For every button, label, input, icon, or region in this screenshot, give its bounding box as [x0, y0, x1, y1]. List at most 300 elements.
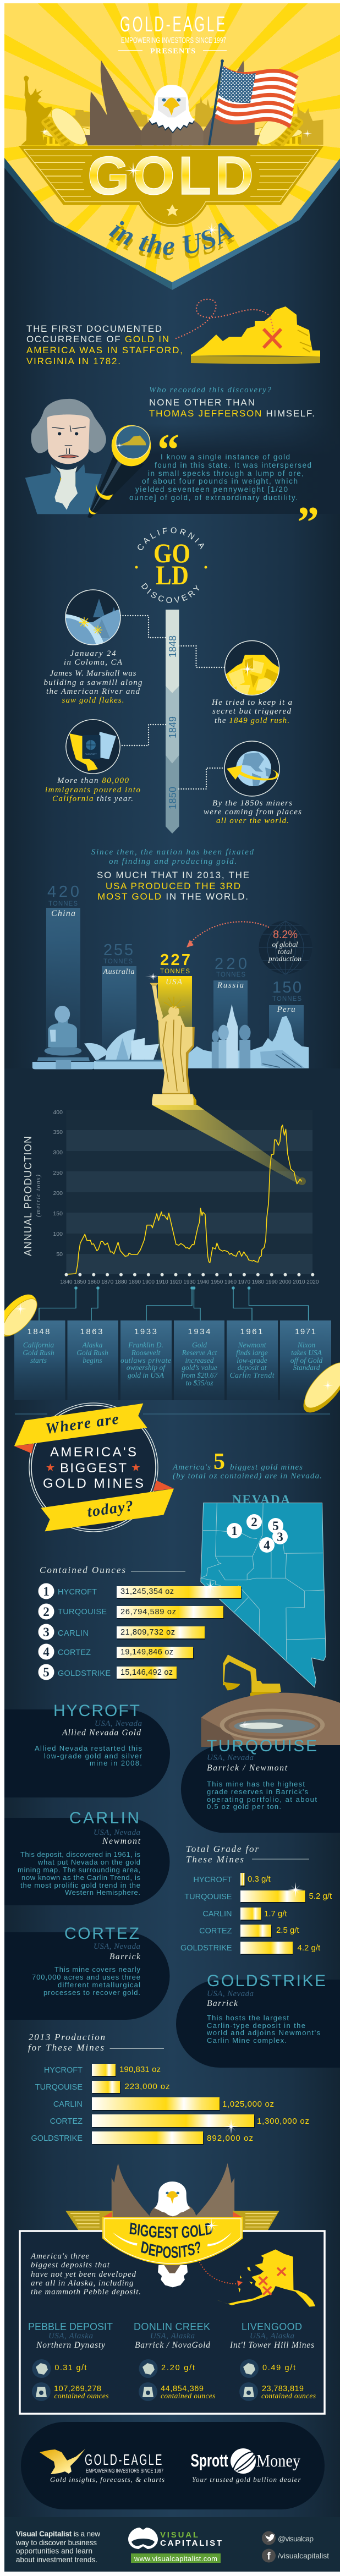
chart: contained ounces: GOLDSTRIKE — [58, 1669, 111, 1678]
heading: California Gold Discovery: LD — [156, 560, 189, 590]
map: Nevada: 4 — [264, 1538, 270, 1552]
arrow: dotted route — [176, 299, 273, 338]
chart: contained ounces: CARLIN — [58, 1629, 89, 1638]
header logo: Gold-Eagle: PRESENTS — [150, 47, 195, 56]
chart: contained ounces: HYCROFT — [58, 1588, 97, 1597]
text: first documented occurrence: VIRGINIA IN 1782. — [26, 356, 120, 366]
bar: Peru: 150 — [272, 979, 301, 996]
panel text: 1934: Gold — [192, 1341, 207, 1349]
bar: China: TONNES — [48, 901, 78, 907]
header bevel edge — [4, 158, 340, 290]
panel: Carlin: This deposit, discovered in 1961, is — [20, 1850, 141, 1859]
panel text: 1863: Alaska — [82, 1341, 103, 1349]
panel: Turquoise: 0.5 oz gold per ton. — [207, 1802, 281, 1811]
chart: x axis: 1970 — [238, 1279, 250, 1285]
text: since then — [91, 848, 254, 902]
quote: Jefferson: in small specks through a lump of ore, — [148, 469, 304, 478]
map: Nevada: 5 — [272, 1519, 279, 1533]
map: Virginia — [176, 299, 320, 364]
chart: production line — [67, 1125, 302, 1274]
bar: Russia — [213, 955, 248, 1067]
chart: total grade: These Mines — [186, 1854, 244, 1865]
column: Pebble Deposit: Northern Dynasty — [36, 2341, 105, 2350]
panel: Carlin: mining map. The surrounding area, — [18, 1866, 140, 1874]
text: He tried to keep it a secret: He tried to keep it a — [211, 698, 292, 707]
panel: Carlin — [4, 1809, 169, 1905]
panel: Turquoise: Barrick / Newmont — [207, 1763, 288, 1773]
text: By the 1850s miners: By the 1850s miners — [212, 799, 292, 808]
column: Donlin Creek — [134, 2321, 216, 2401]
bar: Australia: Australia — [102, 968, 134, 976]
logo: Gold-Eagle — [40, 2449, 164, 2484]
chart: 2013 production: HYCROFT — [44, 2066, 83, 2075]
panel text: 1971: takes USA — [291, 1349, 322, 1357]
chart: y axis labels: 400 — [53, 1109, 63, 1116]
panel text: 1848: 1848 — [28, 1327, 50, 1336]
column: Livengood: contained ounces — [261, 2392, 316, 2400]
chart: x axis: 2010 — [293, 1279, 305, 1285]
landmark: Statue of Liberty — [145, 973, 196, 1105]
illustration: telescope — [87, 425, 151, 518]
panel: Goldstrike: USA, Nevada — [207, 1989, 254, 1998]
bar: Australia: 255 — [103, 941, 133, 959]
chart: total grade: GOLDSTRIKE — [180, 1944, 232, 1953]
timeline ribbon: 1850 — [167, 787, 178, 809]
chart: x axis: 2000 — [279, 1279, 292, 1285]
panel text: 1933: outlaws private — [120, 1356, 171, 1364]
chart: x axis: 1900 — [142, 1279, 155, 1285]
dotted timeline connectors — [120, 616, 225, 789]
heading: California Gold Discovery: DISCOVERY — [141, 583, 199, 603]
column: Pebble Deposit: contained ounces — [54, 2392, 109, 2400]
chart: 2013 production: 1,025,000 oz — [222, 2100, 274, 2109]
illustration: Thomas Jefferson — [25, 399, 106, 514]
panel: Goldstrike: This hosts the largest — [207, 2014, 289, 2022]
arrow: to Alaska — [200, 2262, 243, 2286]
text: More than 80,000 immigrants: immigrants poured into — [45, 786, 141, 794]
chart: x axis: 1850 — [74, 1279, 86, 1285]
quote: Jefferson: I know a single instance of gold — [161, 453, 290, 461]
column: Pebble Deposit: 0.31 g/t — [54, 2364, 86, 2372]
header coins — [37, 104, 312, 154]
quote: Jefferson: found in this state. It was interspersed — [155, 461, 311, 469]
landmark: Buddha — [32, 1006, 94, 1069]
header gold banner — [19, 146, 323, 227]
landmark: Sydney Opera House — [84, 1029, 166, 1069]
chart: x axis: 1860 — [87, 1279, 100, 1285]
chart: contained ounces: TURQOUISE — [58, 1608, 107, 1616]
social: facebook — [262, 2548, 329, 2563]
panel: Carlin: now known as the Carlin Trend, is — [21, 1873, 141, 1882]
chart: 2013 production: 2013 Production — [29, 2032, 105, 2042]
panel text: 1848: California — [23, 1341, 54, 1349]
chart: contained ounces: 2 — [43, 1605, 50, 1619]
history panels — [14, 1286, 331, 1400]
panel text: 1933: Roosevelt — [131, 1349, 161, 1357]
coin: left — [4, 1294, 37, 1337]
badge: biggest gold deposits: DEPOSITS? — [141, 2241, 200, 2258]
social: twitter: @visualcap — [278, 2534, 314, 2543]
panel: Goldstrike: Carlin-type deposit in the — [207, 2021, 305, 2030]
chart: x axis: 1840 — [60, 1279, 73, 1285]
logo: Sprott Money: Sprott — [190, 2451, 228, 2470]
illustration: open pit mine — [201, 1693, 340, 1747]
text: who recorded this discovery: Who recorded this discovery? — [149, 386, 272, 394]
bar: Peru: Peru — [276, 1005, 295, 1014]
text: who recorded this discovery: THOMAS JEFFERSON HIMSELF. — [149, 408, 315, 419]
ground band — [4, 1068, 340, 1400]
panel: Cortez: 700,000 acres and uses three — [32, 1973, 140, 1981]
callout: 8.2% of global production: of global — [272, 940, 298, 949]
text: since then: USA PRODUCED THE 3RD — [106, 881, 240, 891]
gold side wings — [65, 2211, 279, 2230]
chart: y axis labels: 150 — [53, 1210, 63, 1217]
panel text: 1863 — [76, 1327, 108, 1364]
chart: x axis: 1980 — [252, 1279, 264, 1285]
header logo: Gold-Eagle: EMPOWERING INVESTORS SINCE 1997 — [121, 36, 226, 45]
badge: Where are America's biggest gold mines today: today? — [86, 1498, 134, 1521]
text: since then: MOST GOLD IN THE WORLD. — [97, 891, 248, 902]
landmarks skyline — [32, 973, 309, 1105]
text: More than 80,000 immigrants: California this year. — [52, 794, 133, 803]
text: since then: Since then, the nation has been fixated — [91, 848, 254, 857]
panel: Carlin: Newmont — [102, 1837, 141, 1846]
panel text: 1933 — [120, 1327, 171, 1379]
chart: x axis: 1930 — [183, 1279, 196, 1285]
heading: California Gold Discovery: GO — [153, 538, 190, 568]
text: since then: SO MUCH THAT IN 2013, THE — [97, 870, 249, 880]
text: More than 80,000 immigrants: More than 80,000 — [57, 776, 129, 785]
column: Donlin Creek: contained ounces — [161, 2392, 216, 2400]
chart: y axis labels: 300 — [53, 1149, 63, 1156]
panel: Turquoise — [181, 1737, 340, 1833]
chart: y axis labels: 50 — [56, 1251, 63, 1258]
panel text: 1971: 1971 — [295, 1327, 316, 1336]
callout: 8.2% of global production: production — [268, 955, 301, 963]
chart: contained ounces: 5 — [43, 1665, 50, 1679]
panel: Carlin: what put Nevada on the gold — [37, 1858, 140, 1866]
text: about Visual Capitalist: Visual Capitalist is a new — [16, 2530, 100, 2538]
chart: x axis: 1920 — [169, 1279, 182, 1285]
panel text: 1961: Newmont — [237, 1341, 267, 1349]
column: Donlin Creek: Barrick / NovaGold — [135, 2341, 210, 2350]
panel: biggest gold deposits — [19, 2217, 326, 2415]
bar: USA — [158, 951, 192, 1053]
panel text: 1961 — [230, 1327, 275, 1379]
column: Donlin Creek: 44,854,369 — [161, 2385, 204, 2393]
panel: Hycroft: USA, Nevada — [95, 1719, 142, 1728]
panel: Hycroft: mine in 2008. — [90, 1759, 142, 1767]
chart: contained ounces: 1 — [43, 1585, 50, 1598]
text: January 24: the American River and — [46, 687, 140, 696]
chart: total grade: Total Grade for — [186, 1844, 259, 1854]
map: Nevada: NEVADA — [232, 1493, 290, 1506]
panel text: 1848 — [23, 1327, 54, 1364]
text: January 24: building a sawmill along — [44, 678, 142, 687]
logo: Gold-Eagle: GOLD-EAGLE — [85, 2451, 163, 2468]
text: America's 5 biggest gold mines: America's — [172, 1463, 211, 1472]
timeline ribbon — [166, 610, 179, 834]
panel text: 1863: Gold Rush — [76, 1349, 108, 1357]
icon: scale — [139, 2382, 157, 2401]
badge: Where are America's biggest gold mines today: Where are — [45, 1411, 120, 1438]
chart: x axis: 1940 — [197, 1279, 210, 1285]
social: facebook: f — [267, 2551, 271, 2562]
panel: Hycroft: HYCROFT — [53, 1702, 140, 1720]
chart: total grade: 0.3 g/t — [248, 1875, 271, 1884]
chart: contained ounces — [39, 1565, 242, 1680]
chart: x axis — [60, 1273, 319, 1285]
panel: Carlin: the most prolific gold trend in the — [20, 1881, 140, 1889]
heading: California Gold Discovery: CALIFORNIA — [138, 527, 204, 550]
bar: USA: USA — [166, 978, 183, 986]
badge: Where are America's biggest gold mines today — [14, 1403, 174, 1532]
text: America's 5 biggest gold mines — [172, 1449, 322, 1481]
panel text: 1933: gold in USA — [128, 1371, 164, 1379]
panel text: 1934: from $20.67 — [182, 1371, 218, 1379]
chart: 2013 production — [28, 2032, 309, 2145]
panel: Hycroft — [4, 1702, 170, 1797]
column: Livengood: 0.49 g/t — [262, 2364, 295, 2372]
chart: contained ounces: 31,245,354 oz — [120, 1587, 174, 1596]
chart: x axis: 1950 — [211, 1279, 223, 1285]
illustration: second eagle — [112, 2163, 234, 2217]
title: in the USA: in the USA — [109, 221, 234, 255]
chart: contained ounces: 15,146,492 oz — [120, 1668, 173, 1677]
panel: Turquoise: grade reserves in Barrick's — [207, 1788, 308, 1796]
title: in the USA: in the USA — [109, 226, 234, 260]
quote: Jefferson: “ — [157, 426, 179, 474]
callout: 8.2% of global production: total — [278, 947, 292, 956]
icon: rock — [139, 2359, 157, 2378]
quote: Jefferson: ” — [297, 498, 319, 547]
text: first documented occurrence — [26, 324, 183, 366]
text: Alaska deposits: have not yet been developed — [31, 2270, 136, 2279]
chart: x axis: 1960 — [224, 1279, 237, 1285]
panel: Cortez: Barrick — [109, 1952, 141, 1961]
quote beam background — [91, 424, 340, 514]
button: website: www.visualcapitalist.com — [134, 2555, 217, 2563]
logo: Sprott Money — [190, 2448, 301, 2484]
text: January 24: saw gold flakes. — [62, 696, 124, 705]
quote: Jefferson: ounce] of gold, of extraordinary ductility. — [129, 494, 298, 502]
panel text: 1961: deposit at — [238, 1363, 267, 1372]
text: January 24 — [44, 649, 142, 705]
text: America's 5 biggest gold mines: 5 — [213, 1449, 225, 1475]
social: facebook: /visualcapitalist — [278, 2551, 329, 2560]
text: America's 5 biggest gold mines: (by total oz contained) are in Nevada. — [173, 1472, 322, 1481]
bar: Peru — [269, 979, 304, 1067]
panel text: 1863: 1863 — [80, 1327, 102, 1336]
panel text: 1971: off of Gold — [290, 1356, 322, 1364]
text: who recorded this discovery — [149, 386, 315, 419]
panel text: 1971: Standard — [293, 1363, 320, 1372]
social: twitter — [262, 2531, 314, 2545]
circle: immigrants passports — [65, 719, 120, 774]
text: about Visual Capitalist: way to discover business — [15, 2539, 97, 2547]
panel text: 1961: low-grade — [237, 1356, 267, 1364]
circle: immigrants passports: PASSPORT — [85, 753, 97, 755]
header US flag — [209, 59, 298, 145]
chart: x axis: 1990 — [266, 1279, 278, 1285]
text: first documented occurrence: AMERICA WAS IN STAFFORD, — [26, 345, 183, 355]
text: By the 1850s miners — [204, 799, 301, 825]
chart: contained ounces: 26,794,589 oz — [120, 1608, 176, 1616]
bar: Russia: 220 — [215, 955, 247, 973]
chart: contained ounces: 19,149,846 oz — [120, 1648, 173, 1657]
panel: Cortez — [4, 1925, 169, 2020]
bar: Russia: TONNES — [216, 972, 245, 978]
chart: x axis: 1880 — [115, 1279, 128, 1285]
chart: 2013 production: for These Mines — [28, 2042, 104, 2053]
chart: total grade — [180, 1844, 332, 1955]
chart: total grade: CARLIN — [202, 1910, 232, 1919]
chart: 2013 production: 892,000 oz — [207, 2134, 253, 2143]
panel text: 1934: to $35/oz — [186, 1379, 213, 1387]
text: who recorded this discovery: NONE OTHER THAN — [149, 397, 255, 408]
text: By the 1850s miners: were coming from places — [204, 808, 301, 816]
quote: Jefferson: yielded seventeen pennyweight [1/20 — [135, 485, 288, 494]
panel: Hycroft: Allied Nevada Gold — [62, 1728, 141, 1738]
panel: Goldstrike: world and adjoins Newmont's — [206, 2029, 320, 2037]
text: Alaska deposits: the mammoth Pebble deposit. — [31, 2288, 141, 2297]
logo: Gold-Eagle: Gold insights, forecasts, & charts — [50, 2475, 164, 2484]
chart: 2013 production: TURQOUISE — [35, 2083, 83, 2092]
column: Donlin Creek: 2.20 g/t — [161, 2364, 195, 2372]
chart: 2013 production: CARLIN — [53, 2100, 83, 2109]
panel: Hycroft: Allied Nevada restarted this — [35, 1744, 142, 1752]
chart: contained ounces: 3 — [43, 1625, 50, 1639]
chart: total grade: HYCROFT — [193, 1876, 232, 1884]
text: about Visual Capitalist: about investment trends. — [16, 2556, 97, 2564]
chart: total grade: TURQOUISE — [184, 1893, 232, 1901]
panel: Goldstrike: Carlin Mine complex. — [207, 2036, 287, 2045]
bar: Russia: Russia — [217, 981, 244, 990]
bar: USA: TONNES — [160, 968, 190, 975]
panel text: 1848: starts — [30, 1356, 47, 1364]
landmark: Machu Picchu — [188, 1016, 309, 1068]
panel text: 1961: Carlin Trendt — [230, 1371, 275, 1379]
text: first documented occurrence: THE FIRST DOCUMENTED — [26, 324, 162, 334]
header eagle — [85, 61, 260, 145]
icon: scale — [32, 2382, 51, 2401]
chart: total grade: 5.2 g/t — [309, 1892, 332, 1901]
panel text: 1933: Franklin D. — [128, 1341, 163, 1349]
text: Alaska deposits: biggest deposits that — [31, 2261, 110, 2270]
panel text: 1863: begins — [83, 1356, 102, 1364]
bar: China — [46, 883, 80, 1067]
chart: y axis title — [23, 1136, 42, 1256]
panel: Turquoise: operating portfolio, at about — [207, 1795, 317, 1804]
bar: Australia — [102, 941, 136, 1067]
chart: y axis title: (metric tons) — [34, 1175, 42, 1217]
panel: Cortez: This mine covers nearly — [54, 1965, 141, 1974]
chart: total grade: CORTEZ — [199, 1927, 232, 1936]
illustration: excavator — [223, 1654, 281, 1697]
icon: rock — [240, 2359, 259, 2378]
header sunburst — [4, 3, 340, 282]
bar: Australia: TONNES — [103, 958, 133, 965]
badge: Where are America's biggest gold mines today: AMERICA'S — [50, 1445, 136, 1460]
bar: China: China — [51, 909, 75, 918]
timeline ribbon: 1848 — [167, 635, 178, 657]
header logo: Gold-Eagle: GOLD-EAGLE — [120, 13, 227, 36]
badge: Where are America's biggest gold mines today: BIGGEST — [60, 1461, 127, 1476]
callout: 8.2% of global production: 8.2% — [273, 929, 298, 941]
column: Donlin Creek: DONLIN CREEK — [134, 2321, 210, 2332]
chart: total grade: 2.5 g/t — [276, 1926, 300, 1935]
header skyline, statue silhouette — [21, 75, 323, 145]
line chart: annual production — [23, 1105, 319, 1285]
chart: x axis: 2020 — [306, 1279, 319, 1285]
text: about Visual Capitalist — [15, 2530, 100, 2564]
logo: Sprott Money: Money — [256, 2451, 300, 2470]
chart: y axis title: ANNUAL PRODUCTION — [23, 1136, 34, 1256]
panel text: 1971 — [290, 1327, 322, 1372]
text: By the 1850s miners: all over the world. — [216, 816, 289, 825]
text: January 24: January 24 — [70, 649, 116, 658]
map: Nevada: 1 — [231, 1524, 238, 1538]
title: GOLD: GOLD — [87, 145, 254, 206]
logo: Visual Capitalist: CAPITALIST — [160, 2539, 222, 2548]
chart: contained ounces: 21,809,732 oz — [120, 1628, 175, 1637]
chart: y axis labels — [53, 1109, 63, 1258]
panel: Goldstrike: GOLDSTRIKE — [207, 1972, 326, 1990]
chart: 2013 production: GOLDSTRIKE — [31, 2134, 83, 2143]
panel text: 1933: ownership of — [127, 1363, 166, 1372]
icon: scale — [239, 2382, 258, 2401]
panel: Cortez: different metallurgical — [58, 1981, 140, 1989]
column: Pebble Deposit: PEBBLE DEPOSIT — [28, 2321, 113, 2332]
badge: biggest gold deposits — [102, 2217, 243, 2279]
panel text: 1934: 1934 — [188, 1327, 210, 1336]
text: January 24: James W. Marshall was — [50, 669, 136, 678]
badge: Where are America's biggest gold mines today: GOLD MINES — [43, 1476, 144, 1491]
panel: Carlin: Western Hemisphere. — [65, 1888, 140, 1897]
chart: x axis: 1870 — [101, 1279, 114, 1285]
text: More than 80,000 immigrants — [45, 776, 141, 803]
text: about Visual Capitalist: opportunities and learn — [16, 2547, 92, 2555]
text: Alaska deposits: America's three — [30, 2252, 89, 2261]
panel: Turquoise: USA, Nevada — [207, 1753, 254, 1762]
quote: Jefferson: of about four pounds in weight, which — [142, 477, 298, 485]
chart: contained ounces: Contained Ounces — [40, 1565, 125, 1575]
panel text: 1934: Reserve Act — [182, 1349, 218, 1357]
chart: x axis: 1890 — [129, 1279, 141, 1285]
circle: sawmill river — [65, 590, 124, 646]
panel text: 1961: finds large — [236, 1349, 268, 1357]
panel text: 1848: Gold Rush — [23, 1349, 54, 1357]
column: Livengood — [229, 2321, 316, 2401]
bar chart: top producers — [46, 883, 304, 1067]
column: Pebble Deposit: 107,269,278 — [54, 2385, 101, 2393]
panel: Goldstrike — [176, 1972, 340, 2068]
chart: y axis labels: 350 — [53, 1129, 63, 1136]
map: Nevada — [201, 1493, 326, 1687]
coin: right — [297, 1356, 340, 1419]
chart: 2013 production: CORTEZ — [50, 2117, 83, 2126]
column: Livengood: Int'l Tower Hill Mines — [229, 2341, 314, 2350]
callout: 8.2% of global production — [187, 921, 312, 974]
bar: USA: 227 — [160, 951, 190, 969]
chart: 2013 production: 190,831 oz — [119, 2065, 161, 2074]
panel: Cortez: CORTEZ — [64, 1925, 139, 1943]
column: Donlin Creek: USA, Alaska — [150, 2332, 195, 2341]
logo: Gold-Eagle: EMPOWERING INVESTORS SINCE 1997 — [86, 2468, 163, 2474]
chart: y axis labels: 250 — [53, 1170, 63, 1176]
chart: 2013 production: 223,000 oz — [124, 2082, 169, 2091]
text: America's 5 biggest gold mines: biggest gold mines — [230, 1463, 303, 1472]
